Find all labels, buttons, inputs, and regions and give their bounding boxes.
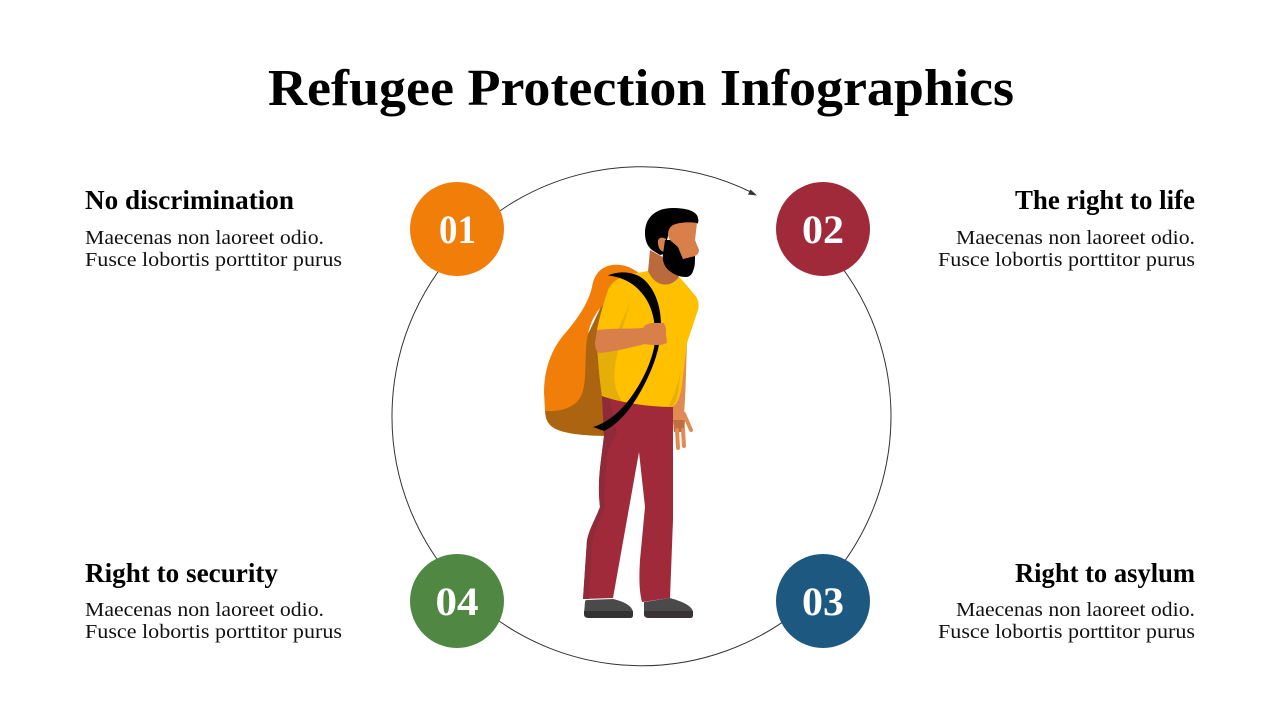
backpack strap <box>593 272 661 431</box>
number badge 03 <box>776 554 870 648</box>
near arm and hand <box>595 323 667 353</box>
number badge 04: 04 <box>436 579 478 624</box>
text block: Right to security: Maecenas non laoreet odio. <box>85 599 324 621</box>
text block: Right to security: Right to security <box>85 558 279 588</box>
number badge 01: 01 <box>439 207 476 252</box>
text block: The right to life: Maecenas non laoreet odio. <box>956 227 1195 249</box>
text block: Right to security: Fusce lobortis porttitor purus <box>85 621 342 643</box>
head <box>645 208 699 277</box>
shoes <box>584 598 693 618</box>
backpack <box>544 265 640 436</box>
number badge 02 <box>776 182 870 276</box>
text block: No discrimination: Maecenas non laoreet odio. <box>85 227 324 249</box>
trousers <box>583 396 673 602</box>
illustration: refugee with backpack <box>544 208 699 618</box>
text block: The right to life <box>938 185 1195 271</box>
far arm and hand <box>672 343 691 448</box>
text block: The right to life: The right to life <box>1015 185 1195 215</box>
text block: No discrimination: No discrimination <box>85 185 294 215</box>
text block: No discrimination <box>85 185 342 271</box>
text block: Right to asylum: Right to asylum <box>1015 558 1195 588</box>
text block: The right to life: Fusce lobortis porttitor purus <box>938 249 1195 271</box>
number badge 02: 02 <box>802 207 844 252</box>
yellow shirt <box>597 271 699 407</box>
neck <box>648 250 679 285</box>
text block: Right to asylum: Fusce lobortis porttitor purus <box>938 621 1195 643</box>
number badge 03: 03 <box>802 579 844 624</box>
title: Refugee Protection Infographics <box>268 60 1014 117</box>
text block: Right to security <box>85 558 342 643</box>
text block: No discrimination: Fusce lobortis porttitor purus <box>85 249 342 271</box>
number badge 01 <box>410 182 504 276</box>
circular arrow ring <box>392 167 891 666</box>
text block: Right to asylum <box>938 558 1195 643</box>
text block: Right to asylum: Maecenas non laoreet odio. <box>956 599 1195 621</box>
number badge 04 <box>410 554 504 648</box>
